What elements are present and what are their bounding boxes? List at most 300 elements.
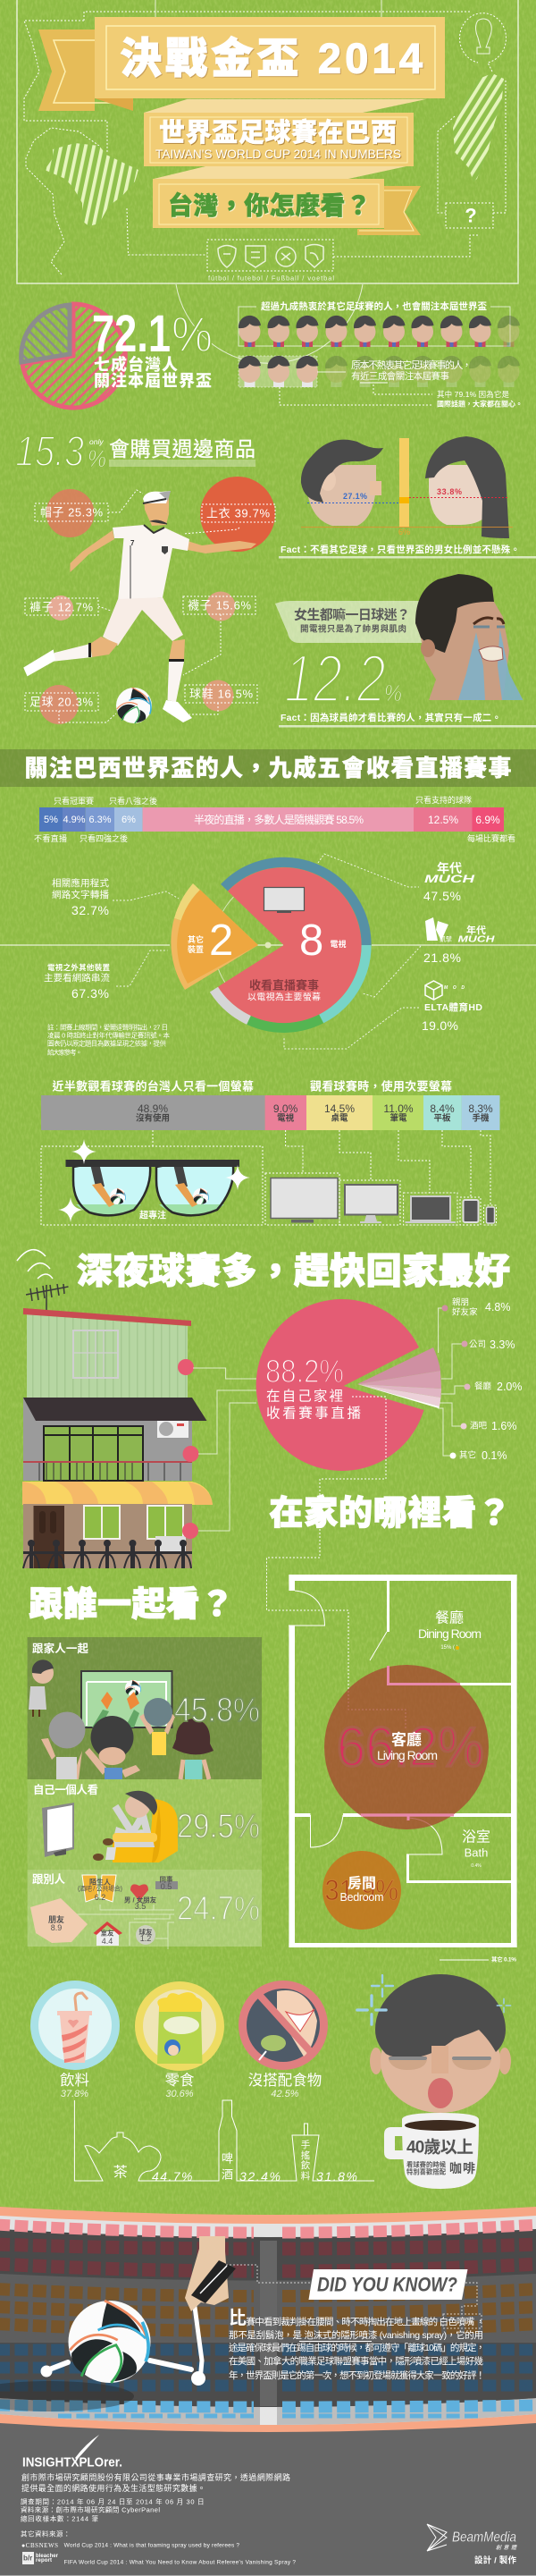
chart: drink outline bars: 44.7%: [152, 2169, 193, 2183]
mug text: 特別喜歡搭配: [406, 2167, 447, 2176]
chart: drink outline bars: 搖: [301, 2150, 311, 2161]
stat: 88.2%: 88.2%: [265, 1353, 344, 1389]
stranger label: (酒吧 / 公共場合): [78, 1885, 122, 1892]
icon: TV: [264, 887, 304, 913]
friends label: [48, 1914, 64, 1932]
pie labels: 公司: [469, 1339, 486, 1350]
pie labels: 3.3%: [490, 1339, 515, 1351]
heading: second screen: 觀看球賽時，使用次要螢幕: [310, 1080, 452, 1093]
subtitle ribbon: [144, 99, 427, 179]
stat: 15.3% merchandise: [15, 428, 255, 476]
merchandise label: shoes: 球鞋 16.5%: [189, 687, 253, 701]
bar labels: 不看直播: [34, 833, 67, 843]
pie chart: where to watch: [256, 1299, 441, 1471]
team crests box: [207, 240, 333, 271]
mug text: 咖啡: [449, 2161, 475, 2175]
merchandise label: shorts: 褲子 12.7%: [29, 601, 93, 613]
friends label: 朋友: [48, 1914, 64, 1924]
icon: standing person: [29, 1660, 54, 1717]
logo: InsightXplorer: [22, 2435, 122, 2470]
merchandise label: ball: 足球 20.3%: [29, 696, 93, 708]
stat: 15.3% merchandise: 15.3: [15, 428, 84, 476]
did you know banner: DID YOU KNOW?: [317, 2273, 457, 2296]
question box: ?: [465, 204, 477, 227]
stacked bar: second screens: 11.0%: [383, 1102, 414, 1115]
fact 1: Fact：不看其它足球，只看世界盃的男女比例並不懸殊。: [281, 544, 520, 555]
dining room label: 餐廳: [435, 1609, 464, 1626]
icon: no food: [239, 1981, 328, 2070]
seats: pink: [0, 2225, 536, 2233]
living room stat: 66.2%: [337, 1717, 484, 1778]
horizontal axis line: [0, 944, 536, 946]
doors: [289, 1591, 442, 1854]
merchandise label: shorts: [25, 598, 98, 615]
stacked bar: second screens: 筆電: [389, 1112, 407, 1123]
bar labels: 每場比賽都看: [467, 833, 515, 843]
icon: antenna: [26, 1284, 68, 1310]
chart: drink outline bars: 手: [301, 2139, 310, 2150]
pie labels: 其它: [459, 1450, 476, 1461]
stacked bar: second screens: 8.3%: [468, 1102, 493, 1115]
title text: 決戰金盃 2014: [120, 34, 423, 82]
company description: 提供最全面的網路使用行為及生活型態研究數據。: [21, 2483, 205, 2493]
bedroom label: [339, 1876, 384, 1904]
label: streaming: 電視之外其他裝置: [47, 963, 110, 972]
label: channel MUCH: MUCH: [424, 873, 475, 885]
stacked bar: second screens: 手機: [472, 1112, 490, 1123]
survey details: 總回收樣本數：2144 筆: [21, 2514, 98, 2523]
bedroom label: 房間: [348, 1876, 376, 1892]
label: channel Kbro and MUCH: MUCH: [457, 935, 496, 944]
bar labels: 只看支持的球隊: [415, 795, 472, 805]
stacked bar: second screens: 沒有使用: [136, 1112, 170, 1123]
door glass: [44, 1426, 143, 1481]
donut chart: screens: 2: [209, 916, 233, 965]
stacked bar: second screens: 電視: [277, 1112, 295, 1123]
value: difference: 6%: [398, 528, 410, 536]
merchandise label: socks: 襪子 15.6%: [188, 599, 251, 612]
merchandise label: ball: [25, 693, 98, 711]
stacked bar: second screens: 桌電: [331, 1112, 348, 1123]
panel: glasses: [41, 1139, 263, 1225]
colleague label: [159, 1874, 173, 1891]
icon: person on sofa: [93, 1791, 178, 1862]
subtitle text: 世界盃足球賽在巴西: [159, 117, 397, 148]
stat: 15.3% merchandise: %: [88, 445, 106, 472]
outer ring: [214, 862, 366, 1027]
food labels: [60, 2072, 322, 2099]
grill: [155, 1536, 186, 1554]
dotted connectors: screens: [153, 1130, 490, 1205]
did you know banner: [309, 2269, 468, 2300]
stacked bar: viewing behaviour: 6%: [121, 815, 136, 825]
text block: 原本不熱衷其它足球賽事的人，: [351, 359, 472, 371]
AC unit: [157, 1421, 188, 1438]
logo: BeamMedia: BeamMedia: [452, 2530, 516, 2545]
section heading band: live viewing: 關注巴西世界盃的人，九成五會收看直播賽事: [25, 755, 511, 781]
upper window: [73, 1330, 118, 1378]
roommate label: [100, 1928, 114, 1946]
question text: 台灣，你怎麼看？: [168, 191, 371, 220]
icon: office desk: [155, 1881, 178, 1889]
merchandise label: hat: [35, 503, 108, 521]
fact 2: Fact：因為球員帥才看比賽的人，其實只有一成二。: [281, 712, 501, 723]
footnote: 凌晨 0 時起終止對年代傳輸世足賽訊號。本: [47, 1030, 170, 1039]
company description: 創市際市場研究顧問股份有限公司從事專業市場調查研究，透過網際網路: [21, 2472, 290, 2482]
text block: 有近三成會關注本屆賽事: [351, 370, 450, 382]
icon: foam spray trail: [42, 2307, 204, 2384]
icon: sleepy man: [357, 1974, 511, 2113]
icon: laptop: [406, 1196, 456, 1223]
merchandise label: shoes: [185, 685, 257, 703]
partner label: 3.5: [135, 1902, 146, 1911]
vanishing spray paragraph: [229, 2308, 485, 2381]
striped awning: [22, 1482, 213, 1505]
icon: snack: [135, 1981, 224, 2071]
speech bubble: 女生都嘛一日球迷？: [294, 606, 410, 622]
pie labels: 4.8%: [485, 1301, 511, 1313]
living room circle: [324, 1665, 489, 1829]
label: streaming: 67.3%: [71, 986, 109, 1001]
other sources: World Cup 2014 : What is that foaming spray used by referees ?: [64, 2543, 239, 2548]
note: 其中 79.1% 因為它是: [437, 390, 509, 399]
stacked bar: second screens: 8.4%: [430, 1102, 455, 1115]
panel: with family: [28, 1637, 262, 1779]
map: South America outline: [26, 128, 99, 274]
icon: TV with goal: [81, 1671, 172, 1727]
pie labels: 1.6%: [491, 1420, 516, 1432]
pie labels: 0.1%: [482, 1449, 507, 1462]
vanishing spray paragraph: 賽中看到裁判掛在腰間、時不時掏出在地上畫線的 白色噴嘴 ，: [247, 2316, 485, 2327]
food labels: 沒搭配食物: [248, 2072, 322, 2089]
chart: drink outline bars: 飲: [301, 2159, 311, 2171]
dotted connectors: donut: [113, 854, 421, 1049]
icon: grey ball: [136, 1925, 155, 1945]
section heading: where at home: 在家的哪裡看？: [270, 1494, 511, 1533]
vanishing spray paragraph: 年，世界盃則是它的第一次，想不到初登場就獲得大家一致的好評！: [229, 2369, 485, 2381]
chart: drink outline bars: 茶: [113, 2164, 128, 2180]
connectors: house to pie: [193, 1368, 256, 1531]
caption: 在自己家裡: [266, 1388, 343, 1404]
company description: [21, 2472, 290, 2493]
icon: heart: [130, 1884, 148, 1901]
panel: with family: 跟家人一起: [32, 1642, 88, 1655]
living room label: Living Room: [377, 1748, 438, 1762]
stacked bar: second screens: 平板: [433, 1112, 451, 1123]
food labels: 37.8%: [61, 2089, 88, 2099]
logo: BeamMedia: 設計 / 製作: [474, 2555, 516, 2566]
icon: hand with spray can: [185, 2236, 236, 2311]
donut chart: screens: 其它: [188, 934, 204, 944]
other sources: 其它資料來源：: [21, 2529, 70, 2538]
logo: BeamMedia: [427, 2524, 517, 2566]
icons: devices: [265, 1173, 497, 1225]
donut chart: screens: 電視: [330, 939, 347, 949]
other sources: [21, 2529, 296, 2566]
label: channel Kbro and MUCH: 年代: [466, 924, 486, 936]
pie labels: 親朋: [452, 1296, 469, 1307]
crest caption: fútbol / futebol / Fußball / voetbal: [208, 274, 334, 283]
ball-mates label: 1.2: [140, 1934, 151, 1943]
icon: football player: 7: [130, 539, 135, 547]
living room label: [377, 1731, 438, 1762]
icon: handshake: [30, 1898, 88, 1943]
stacked bar: viewing behaviour: 5%: [44, 815, 58, 825]
colleague label: 同事: [159, 1874, 173, 1883]
panel: alone: [28, 1779, 262, 1870]
icon: wifi signal: [17, 1250, 53, 1279]
vanishing spray paragraph: 比: [229, 2308, 247, 2328]
stacked bar: viewing behaviour: 4.9%: [63, 815, 86, 825]
vanishing spray paragraph: 途是確保球員們在踢自由球的時候，都可遵守「離球10碼」的規定，: [229, 2342, 485, 2353]
infographic: male and female faces: [301, 436, 513, 538]
roommate label: 4.4: [102, 1937, 113, 1946]
merchandise label: socks: [183, 596, 255, 614]
shadow of ball: [0, 2381, 134, 2411]
seats: blue: [0, 2350, 536, 2386]
icon: phone: [486, 1207, 495, 1223]
bar labels: 只看八強之後: [109, 796, 157, 806]
icon: crying player: [415, 574, 523, 700]
pie labels: 餐廳: [474, 1381, 491, 1391]
stat caption: 關注本屆世界盃: [94, 371, 212, 390]
stacked bar: viewing behaviour: [34, 795, 515, 843]
lower windows: [84, 1506, 183, 1539]
walls: [289, 1575, 517, 1947]
speech bubble: 開電視只是為了帥男與肌肉: [300, 624, 406, 635]
label: streaming: 主要看網路串流: [44, 972, 111, 984]
pie labels: 酒吧: [470, 1422, 488, 1431]
bar labels: [34, 795, 515, 843]
footnote: 圖表仍以原定題目為數據呈現之依據，提供: [47, 1039, 166, 1048]
pie chart: 72.1%: [21, 304, 125, 408]
donut chart: screens: 以電視為主要螢幕: [247, 991, 321, 1003]
map: Taiwan: [453, 73, 504, 182]
stat: 72.1%: 72.1: [92, 305, 171, 363]
other sources: report: [36, 2558, 52, 2563]
section heading: go home: 深夜球賽多，趕快回家最好: [77, 1251, 510, 1291]
dashed connector to floor plan: [266, 1397, 406, 1728]
merchandise bubbles: [39, 477, 275, 724]
question box: [446, 203, 493, 228]
bedroom circle: [322, 1851, 401, 1930]
label: apps: 32.7%: [71, 903, 109, 917]
other label: 其它 0.1%: [491, 1955, 516, 1964]
center bar: [399, 438, 409, 528]
donut chart: screens: 收看直播賽事: [249, 978, 319, 992]
chart: drink outline bars: 料: [301, 2170, 311, 2182]
partner label: [124, 1896, 157, 1911]
stacked bar: second screens: [41, 1095, 500, 1130]
stat caption: 七成台灣人: [94, 355, 178, 374]
stacked bar: viewing behaviour: 12.5%: [428, 814, 458, 826]
bedroom stat: 31.9%: [325, 1874, 398, 1906]
icon: beers: [82, 1875, 116, 1902]
donut chart: screens: [171, 862, 366, 1027]
chart: drink outline bars: 31.8%: [316, 2169, 357, 2183]
logo: BeamMedia: 創意體: [496, 2544, 517, 2551]
stat caption: [94, 355, 212, 390]
seats: maroon: [0, 2244, 536, 2271]
other sources: b/r: [23, 2554, 32, 2563]
people row: football fans: [239, 300, 520, 347]
front door: [34, 1506, 64, 1568]
chart: drink outline bars: [74, 2100, 374, 2183]
stranger label: 6.2: [95, 1893, 105, 1902]
label: channel Kbro and MUCH: 凱擘: [440, 935, 452, 942]
dotted callout connector: [226, 2265, 482, 2328]
logo: InsightXplorer: INSIGHTXPLOrer.: [22, 2455, 122, 2470]
pie labels: [438, 1296, 522, 1462]
icon: house: [93, 1921, 122, 1946]
merchandise label: shirt: [202, 504, 275, 522]
field lines: [17, 0, 518, 363]
icons: crests: [218, 245, 323, 267]
seats: brown: [0, 2289, 536, 2331]
stacked bar: viewing behaviour: 6.9%: [475, 814, 500, 826]
stat: 12.2%: 12.2: [284, 641, 386, 717]
icon: male face: [301, 440, 383, 526]
caption: 收看賽事直播: [266, 1406, 361, 1422]
donut chart: screens: 8: [299, 916, 323, 965]
other sources: bleacher: [36, 2554, 59, 2559]
label: apps: [52, 877, 109, 917]
other-device wedge: [171, 883, 258, 990]
label: channel ELTA: [422, 981, 482, 1033]
stat: 15.3% merchandise: only: [89, 437, 104, 446]
minor slices: [357, 1347, 441, 1408]
stacked bar: second screens: 9.0%: [273, 1102, 298, 1115]
icon: female face: [425, 436, 509, 538]
dashed map route: [24, 12, 506, 257]
stat caption: 會購買週邊商品: [109, 437, 255, 460]
icon: tablet: [463, 1200, 479, 1222]
label: channel ELTA: 19.0%: [422, 1018, 458, 1033]
label: channel ELTA: ELTA體育HD: [424, 1001, 482, 1013]
question ribbon: [153, 179, 421, 235]
stat: 12.2%: %: [384, 680, 402, 706]
dining room label: Dining Room: [418, 1626, 482, 1641]
section heading: with whom: 跟誰一起看？: [29, 1586, 234, 1624]
icon: TV side view: [42, 1803, 74, 1857]
donut chart: screens: 裝置: [188, 944, 204, 954]
icon: brazuca ball: [116, 688, 152, 723]
stranger label: [78, 1878, 122, 1902]
other sources: FIFA World Cup 2014 : What You Need to Know About Referee's Vanishing Spray ?: [64, 2559, 296, 2566]
mug text: 40歲以上: [406, 2137, 473, 2157]
panel: with others: 跟別人: [32, 1873, 65, 1886]
label: apps: 網路文字轉播: [52, 889, 109, 900]
label: channel MUCH: 年代: [437, 861, 462, 875]
icon: house: [22, 1308, 213, 1568]
label: channel Kbro and MUCH: 21.8%: [423, 950, 461, 965]
location dots: [178, 1359, 198, 1539]
value: female: 33.8%: [437, 487, 462, 496]
stat: 72.1%: [92, 305, 213, 390]
bedroom label: Bedroom: [339, 1891, 384, 1904]
bath label: 浴室: [462, 1829, 490, 1845]
panel: stadium stands: [0, 2207, 536, 2576]
section heading band: live viewing: [0, 749, 536, 787]
icon: football player: [25, 491, 256, 722]
ball-mates label: [139, 1928, 153, 1943]
panel: alone: 自己一個人看: [33, 1783, 98, 1796]
footnote: [47, 1023, 170, 1057]
label: channel MUCH: [423, 861, 475, 903]
pie labels: 好友家: [452, 1307, 478, 1318]
speech bubble: [275, 601, 424, 643]
seats: light blue: [0, 2405, 536, 2407]
icon: world cup trophy: [459, 13, 506, 72]
label: channel ELTA: MOD: [444, 985, 465, 991]
stacked bar: second screens: 14.5%: [324, 1102, 355, 1115]
title ribbon: [38, 17, 445, 111]
note: 國際話題，大家都在關心。: [437, 399, 523, 408]
icon: coffee mug: [384, 2113, 479, 2189]
bar labels: 只看冠軍賽: [54, 796, 94, 806]
vanishing spray paragraph: 在美國、加拿大的職業足球聯盟賽事當中，隱形噴漆已經上場好幾: [229, 2355, 484, 2367]
chart: drink outline bars: 酒: [222, 2167, 233, 2182]
text block: [351, 359, 472, 382]
bar labels: 只看四強之後: [80, 833, 128, 843]
heading: single screen: 近半數觀看球賽的台灣人只看一個螢幕: [52, 1080, 254, 1093]
pie labels: 2.0%: [497, 1381, 522, 1393]
mug text: 看球賽的時候: [406, 2160, 447, 2169]
bath label: [462, 1829, 490, 1869]
icon: desktop: [345, 1185, 398, 1223]
caption: [266, 1388, 361, 1422]
merchandise label: hat: 帽子 25.3%: [40, 506, 103, 519]
english subtitle: TAIWAN'S WORLD CUP 2014 IN NUMBERS: [155, 147, 401, 161]
dining room label: [418, 1609, 482, 1651]
panel: glasses: 超專注: [139, 1209, 166, 1221]
bath label: Bath: [465, 1845, 488, 1860]
survey details: 調查期間：2014 年 06 月 24 日至 2014 年 06 月 30 日: [21, 2496, 204, 2505]
merchandise label: shirt: 上衣 39.7%: [206, 506, 270, 520]
ball-mates label: 球友: [139, 1928, 153, 1937]
value: male: 27.1%: [343, 492, 367, 501]
label: channel Kbro and MUCH: [423, 917, 496, 965]
dining room label: 15% ( ): [440, 1645, 458, 1651]
stacked bar: viewing behaviour: 6.3%: [88, 815, 112, 825]
food labels: 飲料: [60, 2072, 89, 2089]
footnote: 註：開賽上線期間，愛爾達聲明指出，27 日: [47, 1023, 168, 1032]
living room label: 客廳: [391, 1731, 422, 1749]
stacked bar: viewing behaviour: 半夜的直播，多數人是隨機觀賽 58.5%: [194, 813, 364, 826]
chart: drink outline bars: 32.4%: [239, 2169, 281, 2183]
stat: 72.1%: %: [172, 306, 213, 362]
icon: brazuca ball large: [68, 2301, 150, 2383]
connectors: [59, 490, 239, 722]
other sources: ●CBSNEWS: [21, 2542, 58, 2549]
map: Brazil: [45, 143, 138, 226]
vanishing spray paragraph: 那不是刮鬍泡，是 泡沫式的隱形噴漆 (vanishing spray)，它的用: [229, 2329, 483, 2341]
note: [437, 390, 523, 408]
panel: alone: 29.5%: [177, 1808, 260, 1845]
TV wedge: [218, 867, 362, 1023]
panel: with others: [28, 1870, 262, 1949]
footnote: 給大家參考。: [47, 1048, 82, 1057]
chart: drink outline bars: 啤: [222, 2151, 233, 2166]
survey details: [21, 2496, 204, 2523]
stacked bar: second screens: 48.9%: [138, 1102, 168, 1115]
food labels: 30.6%: [165, 2089, 194, 2099]
colleague label: 0.5: [161, 1882, 172, 1891]
stranger label: 陌生人: [89, 1878, 111, 1887]
panel: with family: 45.8%: [174, 1692, 260, 1729]
other label: [440, 1955, 516, 1964]
mug text: [406, 2137, 475, 2176]
